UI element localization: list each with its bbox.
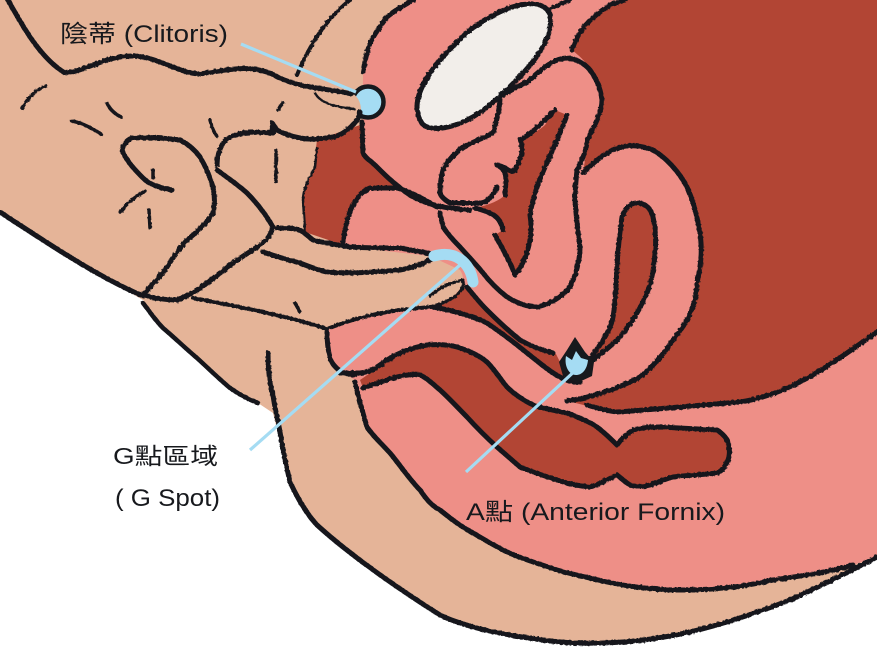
outline: upper hand and finger [8, 0, 352, 94]
rectum [360, 345, 730, 487]
outline: inner canal [475, 110, 567, 275]
large dark red region [567, 0, 877, 412]
icon: G spot marker [434, 254, 473, 282]
outline: upper pink line [363, 0, 413, 72]
pointer line: A spot [466, 368, 578, 472]
outline: uterus and right organ [567, 146, 701, 401]
outline: rectum [340, 345, 730, 487]
outline: outer body curve [268, 353, 877, 643]
outline: lower body edge [143, 303, 258, 403]
lower canal wedge [433, 285, 570, 382]
outline: canal upper [467, 287, 553, 353]
icon: clitoris marker [330, 86, 384, 128]
outline: labial fold [343, 188, 437, 242]
label: G spot English: ( G Spot) [115, 485, 220, 512]
outline: pink body lower edge [355, 382, 853, 590]
outline: lower finger top [277, 228, 432, 254]
outline: upper organ loop [440, 58, 602, 307]
short crease strokes [22, 86, 300, 312]
outline: dark region top [572, 0, 625, 50]
icon: A spot marker [559, 337, 594, 383]
pelvic tissue pink [327, 0, 877, 590]
bladder [417, 4, 551, 128]
outline: labia lower [327, 332, 355, 375]
outline: fingernail [315, 93, 354, 109]
outline: lower finger underside [193, 298, 440, 329]
outline: fingertip and underside [217, 112, 360, 165]
outline: wrist edge [0, 212, 143, 296]
outline: right lower contour [587, 332, 877, 412]
pointer line: clitoris [241, 44, 356, 92]
label: G spot Chinese: G點區域 [113, 443, 218, 469]
outline: palm to lower finger [143, 170, 273, 300]
outline: vulva curve [362, 122, 470, 210]
outline: bladder top right line [547, 0, 570, 10]
uterine slit [590, 203, 656, 360]
outline: uterine slit [590, 203, 656, 362]
outline: bladder [417, 4, 551, 128]
label: anterior fornix: A點 (Anterior Fornix) [466, 499, 725, 526]
central canal [475, 110, 567, 275]
outline: lower fingertip nail [430, 280, 463, 306]
lower finger [193, 228, 463, 330]
outline: knuckle fold [122, 138, 214, 295]
outline: canal lower [433, 307, 580, 382]
outline: skin line to top [297, 0, 350, 75]
pointer line: G spot [250, 265, 460, 450]
label: clitoris: 陰蒂 (Clitoris) [60, 21, 228, 48]
outline: dark tissue edge [303, 148, 317, 230]
dark red tissue behind fingers [303, 125, 400, 245]
outline: lower finger second line [263, 252, 434, 273]
